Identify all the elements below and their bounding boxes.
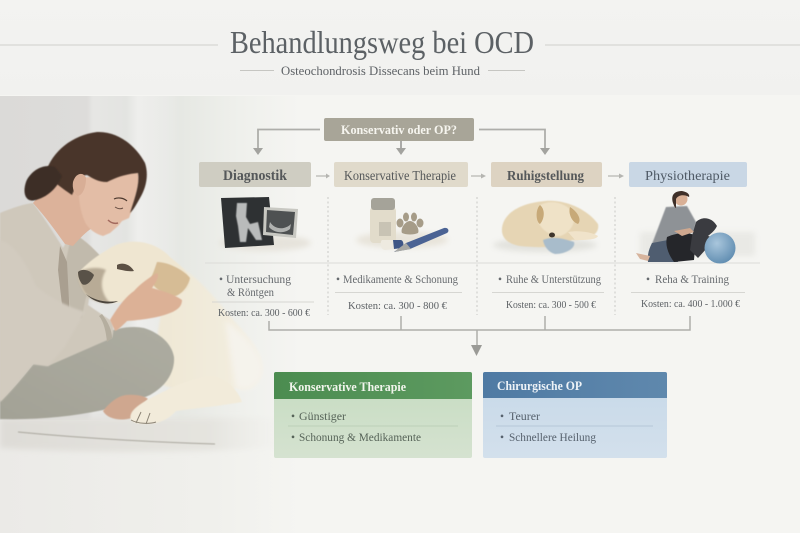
- column: Ruhigstellung: [491, 162, 604, 311]
- dog body: [150, 262, 263, 395]
- panel bullets: Schnellere Heilung: [509, 432, 596, 444]
- list: Diagnostik: Untersuchung: [226, 274, 291, 286]
- heading: Physiotherapie: [629, 162, 747, 187]
- cost: Diagnostik: Kosten: ca. 300 - 600 €: [218, 308, 311, 319]
- heading: Ruhigstellung: [491, 162, 602, 187]
- list: Diagnostik: & Röntgen: [227, 287, 274, 299]
- list: Physiotherapie: •: [646, 274, 650, 286]
- arrow: decision to Ruhigstellung: [479, 130, 550, 155]
- list: Diagnostik: •: [219, 274, 223, 286]
- list: Konservative Therapie: •: [336, 274, 340, 286]
- column: Diagnostik: [199, 162, 314, 319]
- woman trousers: [0, 327, 174, 419]
- panel bullets: [496, 411, 653, 444]
- subtitle: Osteochondrosis Dissecans beim Hund: [281, 63, 480, 78]
- list: Konservative Therapie: Medikamente & Schonung: [343, 274, 458, 286]
- panel: Chirurgische OP: [483, 372, 667, 458]
- title: Behandlungsweg bei OCD: [230, 24, 534, 60]
- icon: therapist with dog and ball: [636, 191, 755, 264]
- arrow: decision to Diagnostik: [253, 130, 320, 155]
- heading: Physiotherapie: Physiotherapie: [645, 169, 730, 184]
- heading: Konservative Therapie: [334, 162, 468, 187]
- panel header: [274, 372, 472, 399]
- heading: Diagnostik: Diagnostik: [223, 168, 288, 184]
- woman neck and face: [33, 172, 139, 246]
- photo background wall and curtains: [0, 96, 300, 426]
- icon: x-ray images: [219, 197, 311, 251]
- panel bullets: •: [291, 411, 295, 423]
- cost: Physiotherapie: Kosten: ca. 400 - 1.000 €: [641, 299, 741, 310]
- header band: [0, 0, 800, 95]
- panel bullets: [288, 411, 458, 444]
- list: Ruhigstellung: Ruhe & Unterstützung: [506, 274, 601, 286]
- icon: resting dog on pillow: [493, 201, 598, 254]
- list: Physiotherapie: Reha & Training: [655, 274, 729, 286]
- heading: Konservative Therapie: Konservative Therapie: [344, 168, 456, 183]
- arrow: Ruhigstellung to Physiotherapie: [608, 174, 624, 178]
- cost: Ruhigstellung: Kosten: ca. 300 - 500 €: [506, 300, 597, 311]
- panel bullets: •: [291, 432, 295, 444]
- woman hair: [24, 132, 147, 213]
- panel header: [483, 372, 667, 398]
- heading: Ruhigstellung: Ruhigstellung: [507, 169, 584, 184]
- arrow: Diagnostik to Konservative Therapie: [316, 174, 330, 178]
- column: Physiotherapie: [629, 162, 755, 310]
- dog head: [78, 242, 190, 303]
- panel bullets: •: [500, 411, 504, 423]
- arrow: decision to Konservative Therapie: [396, 141, 406, 155]
- panel title: Konservative Therapie: [289, 380, 406, 394]
- panel bullets: Teurer: [509, 411, 540, 423]
- panel: Konservative Therapie: [274, 372, 472, 458]
- arrow: Konservative Therapie to Ruhigstellung: [471, 174, 486, 178]
- title block: [0, 24, 800, 78]
- panel bullets: Schonung & Medikamente: [299, 432, 421, 444]
- list: Ruhigstellung: •: [498, 274, 502, 286]
- woman hand on dog: [110, 273, 182, 331]
- panel bullets: Günstiger: [299, 411, 346, 423]
- list: Diagnostik: [219, 274, 291, 299]
- column: Konservative Therapie: [334, 162, 468, 312]
- heading: Diagnostik: [199, 162, 311, 187]
- woman sweater: [0, 203, 113, 402]
- panel bullets: •: [500, 432, 504, 444]
- photo: woman with dog: [0, 96, 300, 533]
- panel title: Chirurgische OP: [497, 379, 582, 393]
- decision box: [324, 118, 474, 141]
- icon: medication, paw and pen: [356, 198, 448, 252]
- connector to results: [269, 316, 690, 356]
- decision box: Konservativ oder OP?: [341, 122, 457, 137]
- floor and rug: [0, 418, 300, 533]
- dog foreleg and paw: [130, 376, 242, 424]
- woman foot: [103, 395, 148, 420]
- cost: Konservative Therapie: Kosten: ca. 300 - 800 €: [348, 300, 447, 312]
